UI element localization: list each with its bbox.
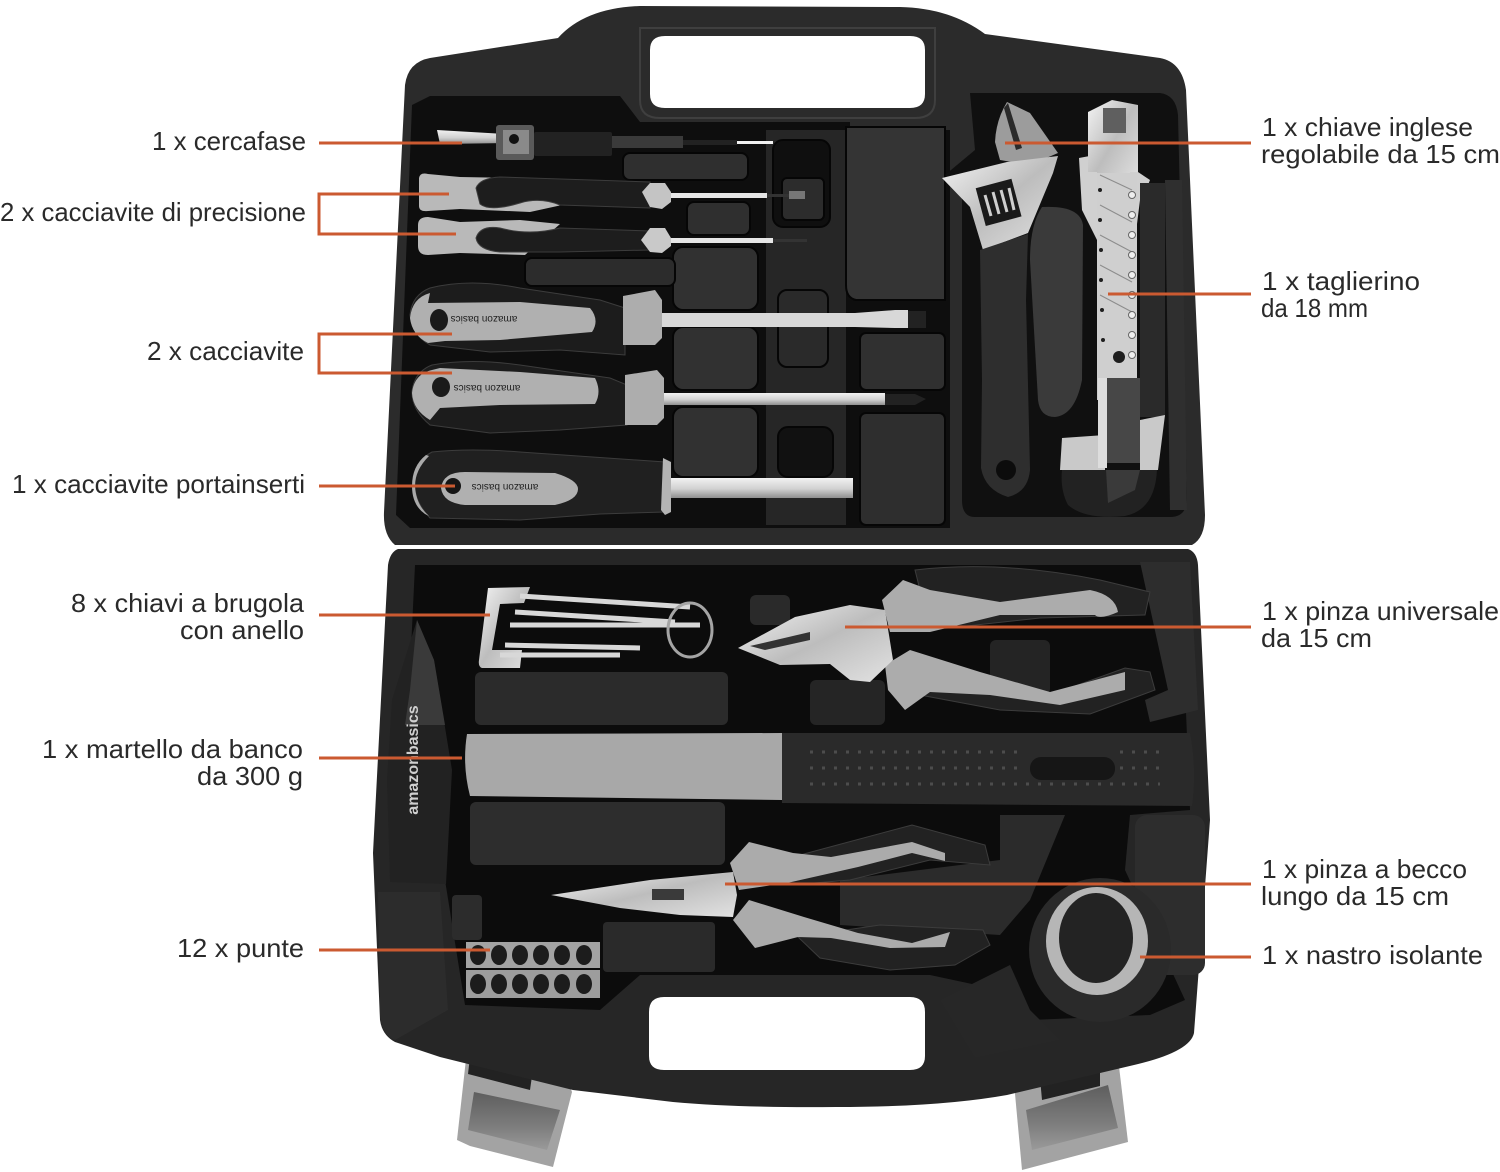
label: cacciavite di precisione: 2 x cacciavite di precisione	[0, 197, 306, 227]
block	[782, 178, 824, 220]
rail	[1165, 180, 1187, 510]
tool: bits	[466, 942, 600, 998]
panel: raised right block	[846, 127, 945, 300]
tool: precision screwdriver 1	[419, 174, 805, 212]
label: chiavi a brugola: con anello	[180, 615, 304, 645]
tool: utility knife	[1060, 100, 1165, 517]
label: nastro isolante: 1 x nastro isolante	[1262, 940, 1483, 970]
label: punte: 12 x punte	[177, 933, 304, 963]
recess	[773, 140, 830, 227]
block: wrench rest	[1030, 207, 1083, 417]
block	[673, 327, 758, 390]
callout line: punte	[319, 948, 490, 952]
tool: precision screwdriver 2	[418, 217, 807, 255]
block	[860, 413, 945, 525]
block: centre right	[840, 815, 1065, 935]
callout line: pinza a becco	[725, 882, 1251, 886]
block: upper centre	[750, 595, 790, 625]
brand text: amazon basics	[454, 382, 520, 393]
tool: hex key set	[479, 587, 712, 668]
label: pinza a becco: lungo da 15 cm	[1261, 881, 1449, 911]
callout line: portainserti	[319, 484, 455, 488]
brand text: amazon basics	[451, 313, 517, 324]
label: martello: 1 x martello da banco	[42, 734, 303, 764]
callout line: nastro isolante	[1140, 956, 1251, 958]
case: lower shell	[373, 549, 1210, 1107]
block	[778, 290, 828, 367]
block	[525, 258, 675, 286]
case: upper shell	[384, 6, 1205, 545]
tool: hammer	[387, 620, 1194, 884]
label: pinza a becco: 1 x pinza a becco	[1262, 854, 1467, 884]
tool: combination pliers	[738, 567, 1155, 714]
block	[623, 153, 748, 180]
label: chiavi a brugola	[71, 588, 305, 645]
label: chiavi a brugola: 8 x chiavi a brugola	[71, 588, 305, 618]
label: chiave inglese	[1261, 112, 1500, 169]
block	[860, 333, 945, 390]
label: cacciavite portainserti: 1 x cacciavite portainserti	[12, 469, 305, 499]
blocks	[525, 127, 945, 525]
callout line: pinza universale	[845, 626, 1251, 628]
block	[687, 202, 750, 235]
block: below tape	[940, 965, 1060, 1058]
tool: insulating tape	[1029, 878, 1171, 1022]
label: taglierino: 1 x taglierino	[1262, 266, 1420, 296]
tray: lower	[400, 565, 1190, 1020]
label: cercafase: 1 x cercafase	[152, 126, 306, 156]
label: pinza a becco	[1261, 854, 1467, 911]
callout line: martello	[319, 756, 462, 760]
tool: screwdriver flat	[410, 283, 926, 355]
block: lower hammer rest	[470, 802, 725, 865]
block: upper centre	[810, 680, 885, 725]
block	[673, 407, 758, 477]
label: cacciavite: 2 x cacciavite	[147, 336, 304, 366]
label: taglierino: da 18 mm	[1261, 293, 1368, 323]
callout line: chiavi a brugola	[319, 614, 490, 616]
callout line: cercafase	[319, 142, 462, 144]
callout line: taglierino	[1108, 292, 1251, 296]
callout line: chiave inglese	[1005, 142, 1251, 144]
label: pinza universale: 1 x pinza universale	[1262, 596, 1499, 626]
block: below pliers	[603, 922, 715, 972]
handle bevel	[640, 28, 935, 118]
block: upper right	[1140, 562, 1198, 722]
block	[673, 247, 758, 310]
label: pinza universale	[1261, 596, 1499, 653]
label: martello: da 300 g	[197, 761, 303, 791]
latch: left	[457, 1050, 572, 1167]
latch: right	[1013, 1058, 1128, 1170]
tool: adjustable wrench	[942, 102, 1058, 497]
tool: screwdriver phillips	[412, 362, 926, 433]
block: small	[452, 895, 482, 940]
tray: upper left	[396, 96, 950, 528]
label: martello	[42, 734, 303, 791]
callout bracket: cacciavite	[319, 334, 452, 373]
block: right of hammer	[1135, 815, 1205, 975]
block: left bottom	[378, 892, 448, 1040]
label: pinza universale: da 15 cm	[1261, 623, 1372, 653]
tool: bit-holder screwdriver	[412, 450, 853, 520]
tool: voltage tester	[437, 125, 773, 160]
block: upper hammer rest	[475, 672, 728, 725]
brand text: amazonbasics	[405, 705, 422, 815]
recess	[778, 427, 833, 477]
tray: upper right	[945, 93, 1187, 517]
tool: long-nose pliers	[551, 825, 990, 970]
block: upper centre	[990, 640, 1050, 695]
panel: raised centre column	[766, 130, 846, 525]
callout bracket: cacciavite di precisione	[319, 194, 456, 234]
label: chiave inglese: 1 x chiave inglese	[1262, 112, 1473, 142]
label: taglierino	[1261, 266, 1420, 323]
brand text: amazon basics	[472, 481, 538, 492]
label: chiave inglese: regolabile da 15 cm	[1261, 139, 1500, 169]
